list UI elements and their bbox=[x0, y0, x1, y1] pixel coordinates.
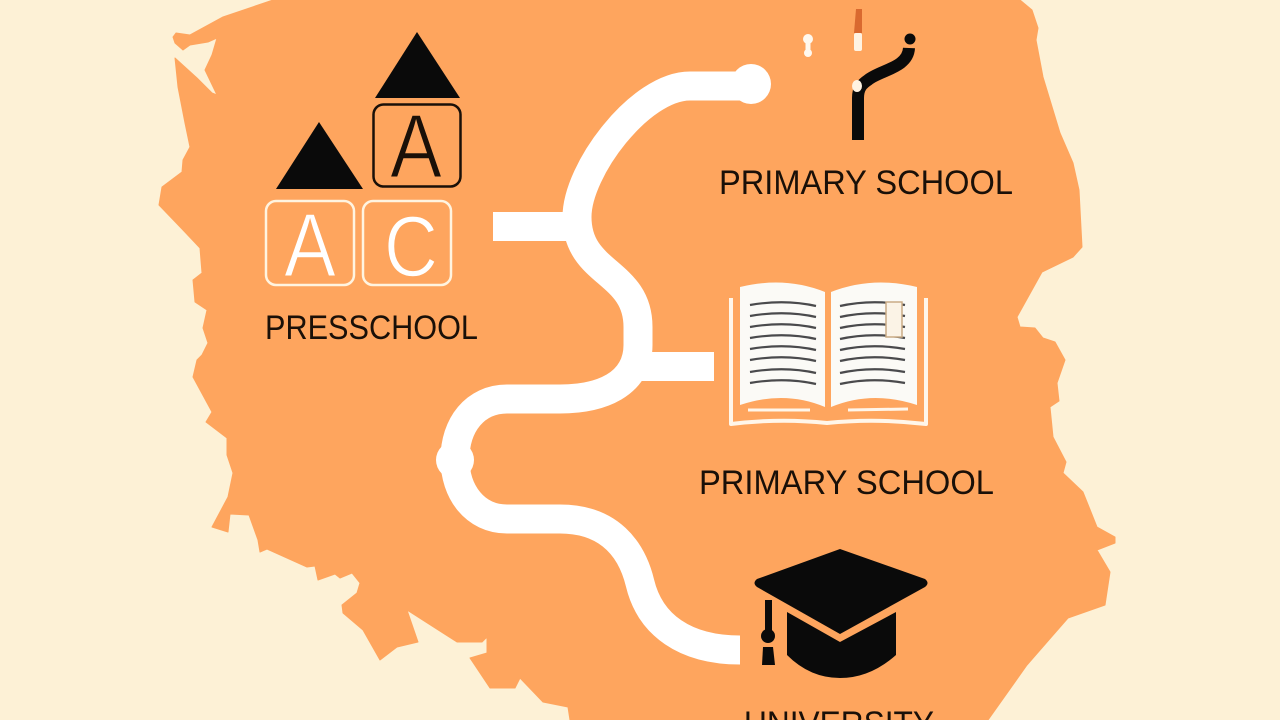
icon: pencil, key and pipe bbox=[803, 9, 916, 140]
label: preschool: PRESSCHOOL bbox=[265, 309, 478, 347]
education pathway bbox=[436, 64, 771, 650]
label: primary school (lower): PRIMARY SCHOOL bbox=[699, 464, 994, 502]
icon: alphabet blocks: C bbox=[384, 199, 438, 295]
icon: open book bbox=[731, 283, 926, 424]
icon: alphabet blocks: A bbox=[284, 196, 336, 296]
map of Poland bbox=[159, 0, 1115, 720]
icon: alphabet blocks bbox=[266, 32, 460, 296]
icon: alphabet blocks: A bbox=[390, 97, 442, 197]
label: primary school (upper): PRIMARY SCHOOL bbox=[719, 164, 1013, 202]
icon: graduation cap bbox=[754, 549, 928, 678]
